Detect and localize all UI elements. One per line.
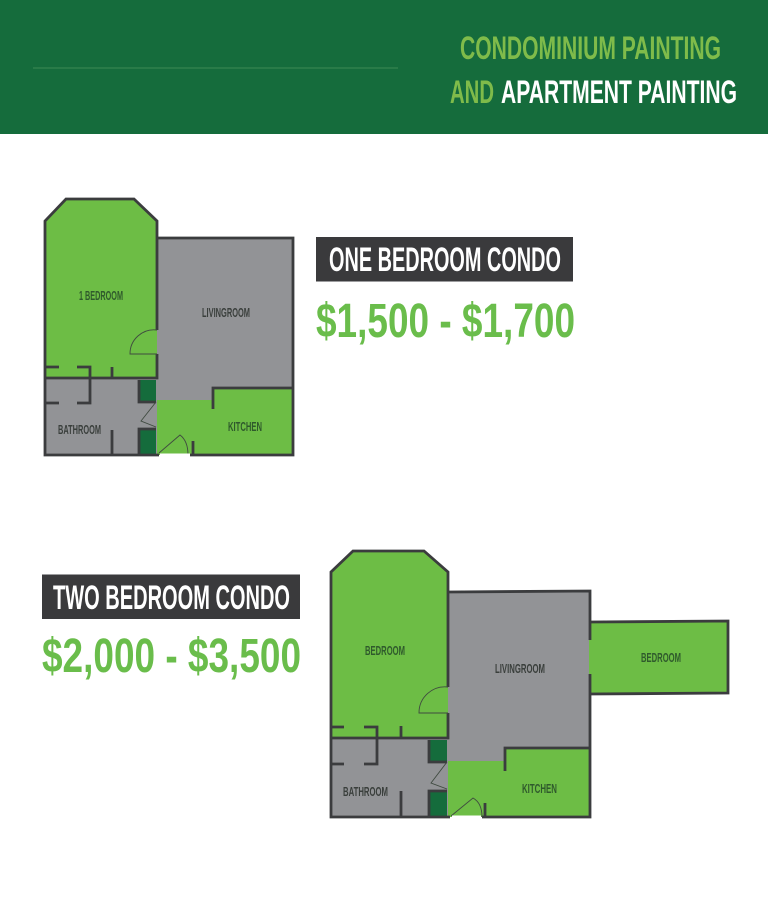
price: two bedroom: $2,000 - $3,500 (42, 630, 301, 683)
closets (429, 740, 447, 817)
room: bathroom (45, 378, 157, 455)
room: livingroom (157, 238, 293, 400)
walls (45, 199, 293, 455)
heading: one bedroom condo (316, 237, 573, 282)
label: bathroom: BATHROOM (343, 784, 388, 799)
heading: two bedroom condo: TWO BEDROOM CONDO (53, 579, 290, 617)
label: 1 bedroom: 1 BEDROOM (79, 288, 123, 303)
room: bedroom (45, 199, 157, 378)
label: kitchen: KITCHEN (228, 419, 262, 434)
label: livingroom: LIVINGROOM (202, 305, 250, 320)
price: one bedroom: $1,500 - $1,700 (316, 295, 575, 348)
room: kitchen (157, 388, 293, 455)
walls (331, 551, 728, 817)
heading: one bedroom condo: ONE BEDROOM CONDO (329, 241, 561, 279)
closets (139, 380, 156, 455)
room: bedroom 2 (589, 621, 728, 694)
doors (419, 687, 482, 817)
label: kitchen: KITCHEN (522, 781, 557, 796)
title line 2: AND (450, 74, 494, 110)
label: bathroom: BATHROOM (58, 422, 101, 437)
room: bathroom (331, 738, 448, 817)
floor plan: one bedroom (45, 199, 293, 456)
heading: two bedroom condo (42, 574, 300, 619)
label: bedroom 2: BEDROOM (641, 650, 681, 665)
room: kitchen (448, 748, 590, 817)
header banner (0, 0, 768, 134)
label: livingroom: LIVINGROOM (495, 661, 545, 676)
label: bedroom 1: BEDROOM (365, 643, 405, 658)
room: bedroom 1 (331, 551, 448, 738)
floor plan: two bedroom (331, 551, 728, 818)
room: livingroom (448, 591, 590, 761)
doors (130, 330, 188, 455)
